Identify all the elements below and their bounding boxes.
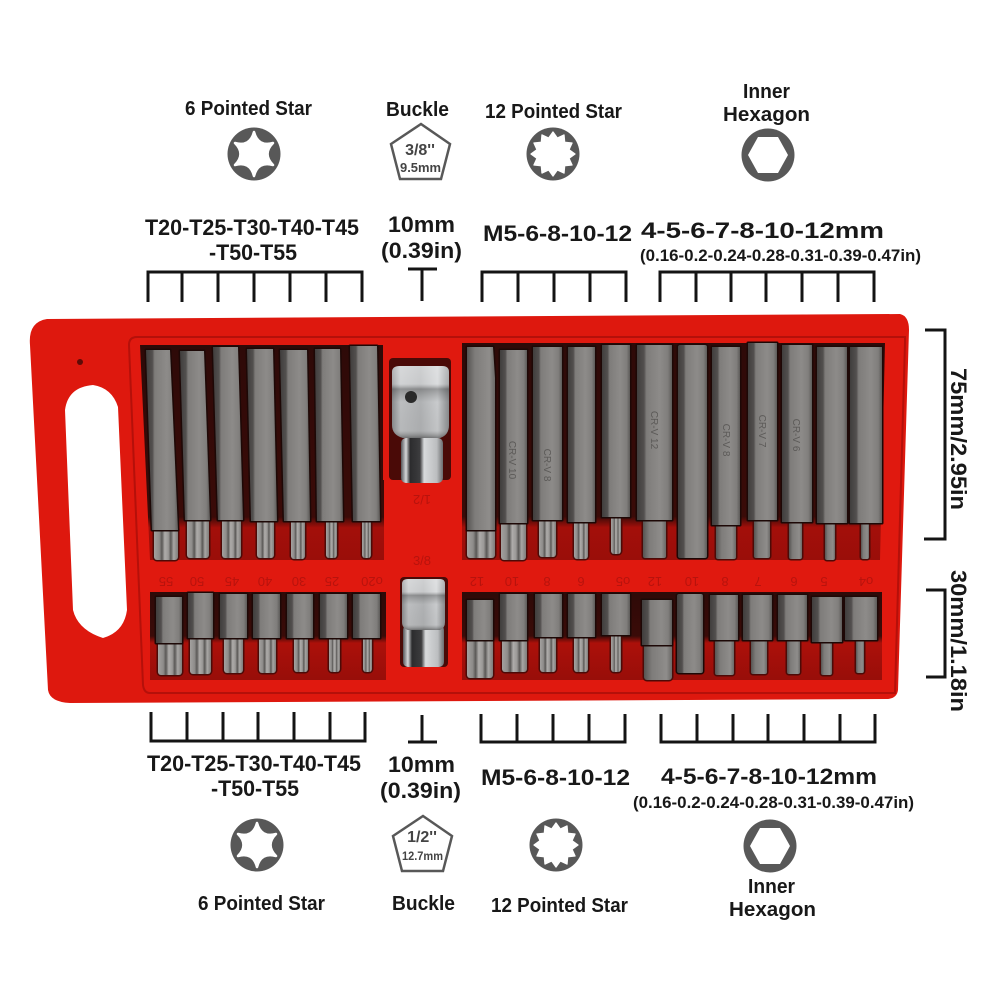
label: torx sizes bottom: -T50-T55: [211, 776, 299, 801]
bracket: buckle bottom: [408, 715, 437, 742]
heading: inner hexagon bottom: Inner: [748, 876, 795, 898]
bracket: hex bottom: [661, 714, 875, 742]
long M and hex bits: [467, 343, 882, 560]
bracket: buckle top: [408, 269, 437, 301]
icon: inner hexagon bottom: [744, 820, 796, 872]
label: hex sizes top: 4-5-6-7-8-10-12mm: [641, 218, 884, 243]
embossed sizes: 8: [721, 574, 729, 589]
bracket: 75mm: [924, 330, 945, 539]
socket neck: [401, 438, 443, 483]
socket ball detent: [405, 391, 417, 403]
embossed sizes: 6: [790, 574, 798, 589]
slot: lower left: [150, 592, 386, 680]
embossed sizes: 3/8: [413, 553, 431, 568]
label: torx sizes top: T20-T25-T30-T40-T45: [145, 215, 359, 240]
icon: 6 pointed star top: [228, 128, 280, 180]
embossed sizes: 5: [820, 574, 828, 589]
long torx bits: [146, 346, 380, 560]
slot: upper left: [140, 345, 384, 560]
slot: upper socket: [389, 358, 451, 480]
bit markings: CR-V 6: [790, 419, 801, 452]
heading: inner hexagon bottom: [729, 876, 816, 921]
icon: 12 pointed star top: [526, 128, 580, 180]
embossed sizes: 25: [325, 574, 339, 589]
bit markings: CR-V 8: [541, 449, 552, 482]
embossed sizes: 45: [225, 574, 239, 589]
icon: buckle pentagon 3/8: [391, 124, 450, 179]
slot: lower socket: [400, 577, 448, 667]
label: torx sizes bottom: T20-T25-T30-T40-T45: [147, 751, 361, 776]
icon: buckle pentagon 1/2: 1/2'': [407, 829, 437, 846]
embossed sizes: 10: [685, 574, 699, 589]
heading: inner hexagon top: Hexagon: [723, 104, 810, 126]
bit markings: [506, 411, 801, 482]
label: torx sizes bottom: [147, 751, 361, 801]
bracket: torx top: [148, 272, 362, 302]
icon: buckle pentagon 1/2: 12.7mm: [402, 849, 443, 863]
label: 75mm length: 75mm/2.95in: [946, 368, 971, 510]
tray recess: [129, 337, 905, 693]
tray mounting hole: [77, 359, 83, 365]
socket neck: [403, 625, 444, 667]
embossed sizes: o4: [859, 574, 873, 589]
socket head: [402, 579, 445, 630]
label: hex sizes bottom: [633, 764, 914, 812]
bracket: M bottom: [481, 714, 625, 742]
slot: upper right: [462, 343, 885, 560]
label: hex sizes bottom: (0.16-0.2-0.24-0.28-0.31-0.39-0.47in): [633, 794, 914, 812]
icon: 12 pointed star bottom: [530, 818, 582, 872]
upper socket 1/2: [392, 366, 449, 483]
icon: buckle pentagon 3/8: 9.5mm: [400, 160, 441, 175]
embossed sizes: o5: [616, 574, 630, 589]
label: hex sizes bottom: 4-5-6-7-8-10-12mm: [661, 764, 877, 789]
label: hex sizes top: [640, 218, 921, 265]
heading: inner hexagon top: [723, 81, 810, 126]
embossed sizes: [159, 492, 873, 589]
tray body with handle: [30, 314, 909, 703]
heading: inner hexagon top: Inner: [743, 81, 790, 103]
embossed sizes: 10: [505, 574, 519, 589]
label: torx sizes top: [145, 215, 359, 265]
icon: inner hexagon top: [742, 128, 794, 182]
icon: buckle pentagon 3/8: 3/8'': [405, 142, 435, 159]
icon: 6 pointed star bottom: [230, 818, 284, 872]
tray: [30, 314, 909, 703]
socket head: [392, 366, 449, 438]
label: buckle size top: 10mm: [388, 212, 455, 237]
short M and hex bits: [467, 594, 877, 680]
bracket: hex top: [660, 272, 874, 302]
heading: 6 pointed star bottom: 6 Pointed Star: [198, 893, 325, 915]
label: buckle size top: [381, 212, 462, 263]
heading: 6 pointed star top: 6 Pointed Star: [185, 98, 312, 120]
bracket: 30mm: [926, 590, 945, 677]
label: torx sizes top: -T50-T55: [209, 240, 297, 265]
embossed sizes: 50: [190, 574, 204, 589]
bit markings: CR-V 7: [756, 415, 767, 448]
label: buckle size bottom: 10mm: [388, 752, 455, 777]
lower socket 3/8: [402, 579, 445, 667]
embossed sizes: 40: [258, 574, 272, 589]
heading: 12 pointed star top: 12 Pointed Star: [485, 101, 622, 123]
embossed sizes: 12: [470, 574, 484, 589]
heading: 12 pointed star bottom: 12 Pointed Star: [491, 895, 628, 917]
socket head shading: [392, 366, 449, 438]
embossed sizes: 7: [754, 574, 762, 589]
label: buckle size bottom: [380, 752, 461, 803]
bit markings: CR-V 12: [648, 411, 659, 450]
label: 30mm length: 30mm/1.18in: [946, 570, 971, 712]
short torx bits: [156, 593, 380, 675]
heading: inner hexagon bottom: Hexagon: [729, 899, 816, 921]
socket head shading: [402, 579, 445, 630]
heading: buckle top: Buckle: [386, 99, 449, 121]
bit markings: CR-V 8: [720, 424, 731, 457]
embossed sizes: 30: [292, 574, 306, 589]
label: M sizes top: M5-6-8-10-12: [483, 221, 632, 246]
slot: lower right: [462, 592, 882, 680]
embossed sizes: 8: [543, 574, 551, 589]
label: buckle size bottom: (0.39in): [380, 778, 461, 803]
bracket: M top: [482, 272, 626, 302]
embossed sizes: 55: [159, 574, 173, 589]
heading: buckle bottom: Buckle: [392, 893, 455, 915]
embossed sizes: 6: [577, 574, 585, 589]
bit markings: CR-V 10: [506, 441, 517, 480]
bracket: torx bottom: [151, 712, 365, 741]
embossed sizes: 12: [648, 574, 662, 589]
icon: buckle pentagon 1/2: [393, 816, 452, 871]
embossed sizes: o20: [361, 574, 383, 589]
embossed sizes: 1/2: [413, 492, 431, 507]
label: M sizes bottom: M5-6-8-10-12: [481, 765, 630, 790]
label: buckle size top: (0.39in): [381, 238, 462, 263]
label: hex sizes top: (0.16-0.2-0.24-0.28-0.31-0.39-0.47in): [640, 247, 921, 265]
